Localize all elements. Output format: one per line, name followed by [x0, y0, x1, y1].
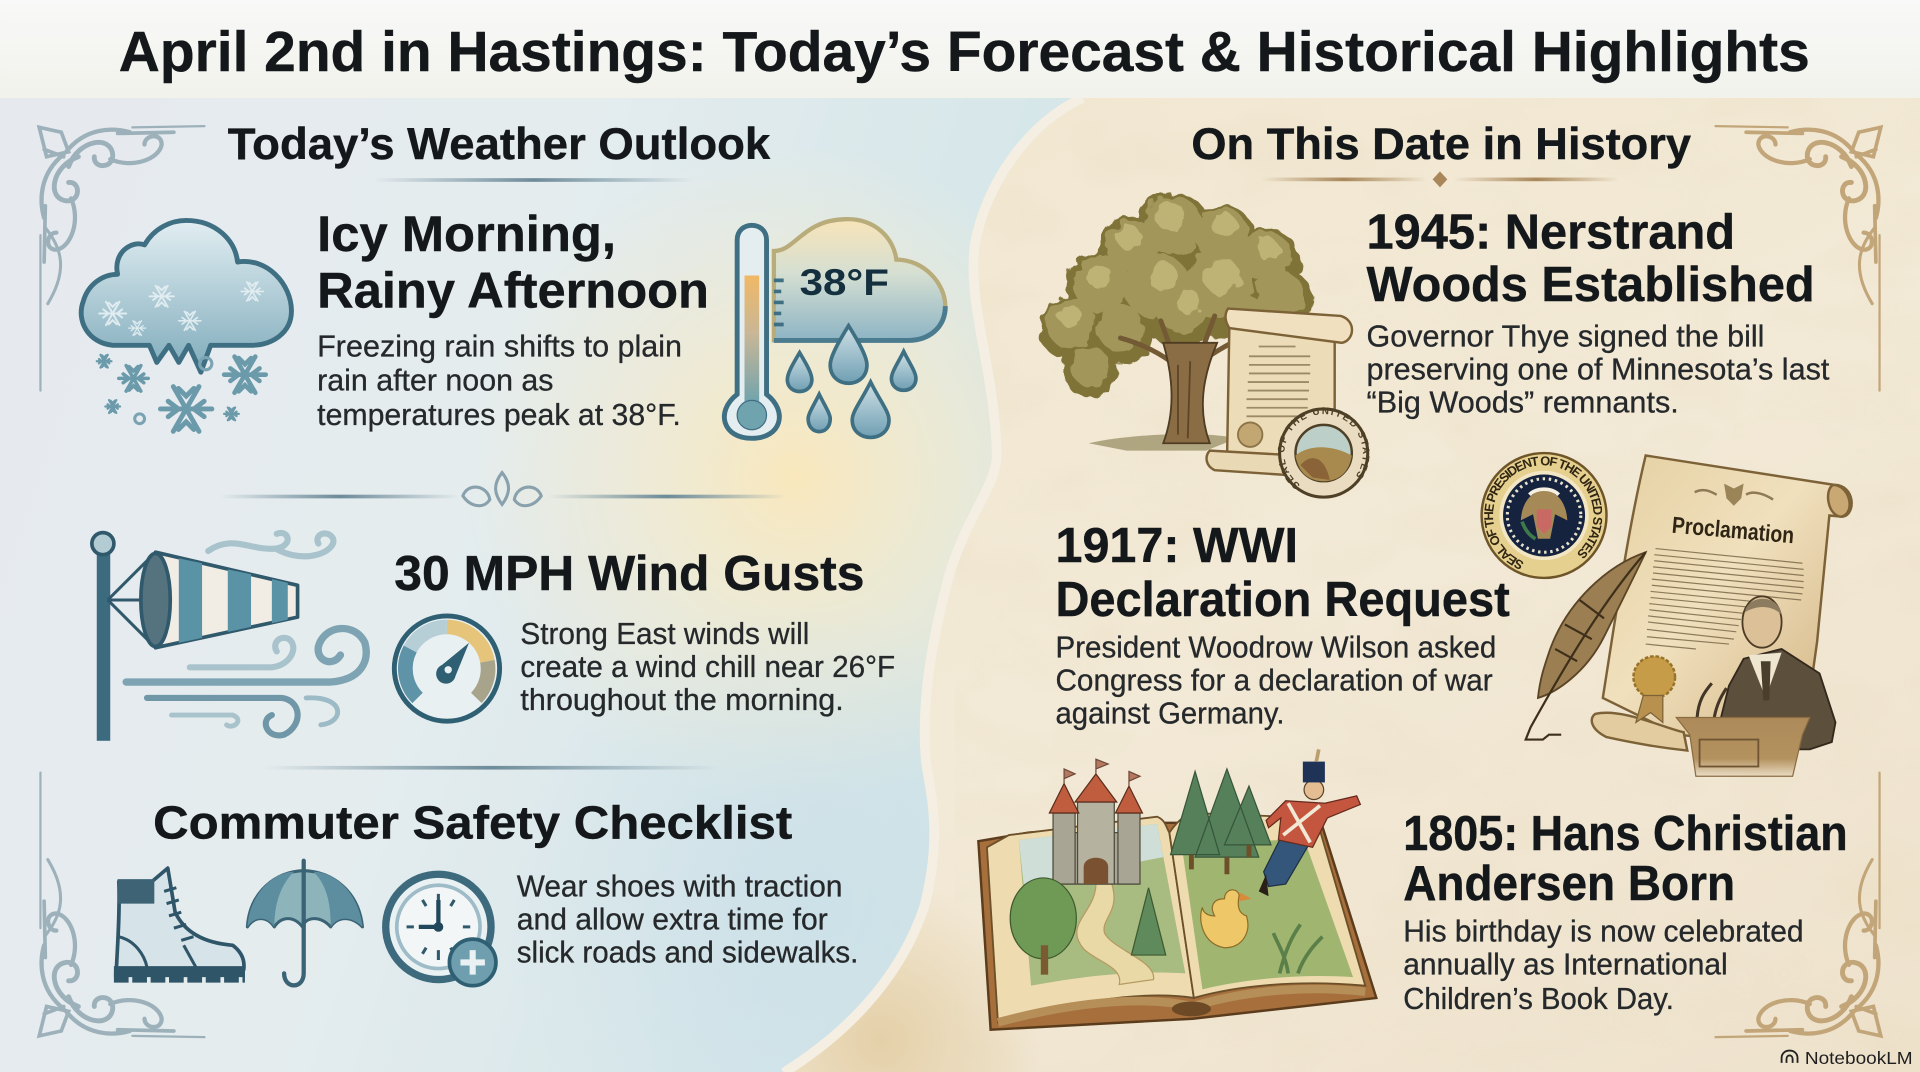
heading: weather outlook: Today’s Weather Outlook: [228, 120, 771, 169]
ornament: top-right corner: [1715, 126, 1881, 391]
icon: clock with plus: [386, 874, 496, 986]
text block: 1917: 1917: WWI: [1056, 519, 1298, 573]
illustration: Woodrow Wilson at podium: [1676, 596, 1835, 776]
right page scene: trees, grass and duck: [1171, 769, 1353, 989]
icon: rain cloud with temperature: [774, 219, 945, 437]
text block: icy morning: temperatures peak at 38°F.: [317, 398, 681, 432]
text block: 1805: Children’s Book Day.: [1403, 982, 1674, 1016]
text block: 1945: Governor Thye signed the bill: [1367, 320, 1764, 354]
title band: [0, 0, 1920, 98]
heading and text: wind gusts: throughout the morning.: [520, 683, 844, 717]
text block: 1917: President Woodrow Wilson asked: [1056, 631, 1496, 665]
text block: 1945: preserving one of Minnesota’s last: [1367, 353, 1830, 387]
heading and text: wind gusts: 30 MPH Wind Gusts: [394, 547, 864, 601]
icon: presidential seal: SEAL OF THE PRESIDENT OF THE UNITED STATES: [1484, 456, 1602, 569]
illustration: proclamation scroll: [1592, 455, 1852, 751]
text block: icy morning: rain after noon as: [317, 364, 553, 398]
divider: [263, 766, 719, 770]
text block: 1917: Congress for a declaration of war: [1056, 664, 1493, 698]
heading and text: wind gusts: [394, 547, 895, 717]
illustration: quill: [1526, 552, 1646, 740]
text block: 1917: against Germany.: [1056, 697, 1284, 731]
icon: boot: [114, 868, 245, 977]
ornament: bottom-right corner: [1715, 773, 1881, 1037]
text block: 1805: [1403, 807, 1848, 1016]
text block: checklist advice: and allow extra time for: [517, 902, 828, 936]
heading and text: wind gusts: Strong East winds will: [520, 617, 809, 651]
icon: state seal: SEAL OF THE UNITED STATES: [1278, 407, 1370, 489]
text block: 1945: 1945: Nerstrand: [1367, 206, 1735, 260]
heading and text: wind gusts: create a wind chill near 26°F: [520, 650, 895, 684]
illustration: oak tree: [1038, 192, 1313, 451]
icon: wind gauge: [394, 616, 500, 721]
text block: 1945: Woods Established: [1367, 258, 1815, 312]
background: weather panel with curved edge: [0, 98, 1082, 1072]
text block: icy morning: Icy Morning,: [317, 206, 616, 262]
text block: 1917: Declaration Request: [1056, 573, 1510, 627]
text block: 1805: Andersen Born: [1403, 857, 1735, 911]
text block: checklist advice: Wear shoes with traction: [517, 869, 842, 903]
text block: checklist advice: [517, 869, 858, 969]
text block: 1917: [1056, 519, 1510, 731]
icon: snow cloud: [81, 220, 291, 431]
ornament: bottom-left corner: [39, 773, 205, 1037]
text block: checklist advice: slick roads and sidewalks.: [517, 935, 858, 969]
illustration: proclamation scroll: Proclamation: [1671, 512, 1795, 548]
heading rule: weather: [373, 178, 694, 182]
icon: wind swirls: [126, 533, 366, 735]
text block: 1805: annually as International: [1403, 948, 1728, 982]
heading: history: On This Date in History: [1191, 120, 1691, 169]
book cover and pages: [978, 813, 1376, 1030]
illustration: signed bill scroll: [1207, 309, 1352, 475]
left page scene: castle and path: [1010, 759, 1185, 986]
heading rule: history: [1261, 171, 1619, 187]
heading: commuter checklist: Commuter Safety Checklist: [153, 797, 792, 849]
text block: 1805: 1805: Hans Christian: [1403, 807, 1848, 861]
text block: icy morning: Rainy Afternoon: [317, 262, 709, 318]
icon: windsock: [92, 533, 298, 741]
watermark: NotebookLM: NotebookLM: [1805, 1048, 1913, 1068]
text block: icy morning: [317, 206, 709, 432]
icon: rain cloud with temperature: 38°F: [800, 262, 889, 303]
illustration: open storybook: [978, 749, 1376, 1030]
toy soldier: [1259, 749, 1360, 896]
ornament: section divider: [220, 473, 786, 506]
text block: icy morning: Freezing rain shifts to plain: [317, 329, 682, 363]
text block: 1945: [1367, 206, 1830, 420]
text block: 1945: “Big Woods” remnants.: [1367, 386, 1679, 420]
text block: 1805: His birthday is now celebrated: [1403, 915, 1804, 949]
icon: thermometer: [724, 225, 784, 438]
title: April 2nd in Hastings: Today’s Forecast & Historical Highlights: [119, 20, 1810, 83]
icon: umbrella: [247, 861, 362, 985]
ornament: top-left corner: [39, 126, 205, 391]
